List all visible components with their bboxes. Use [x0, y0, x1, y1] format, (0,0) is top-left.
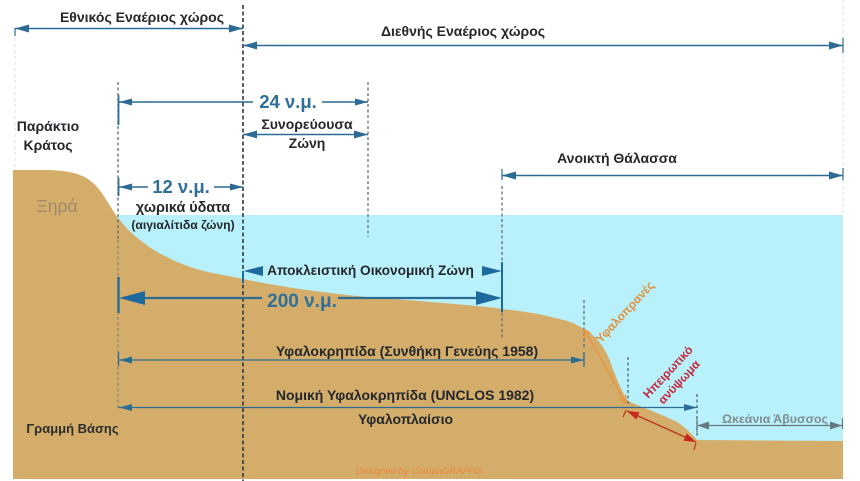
sea water — [118, 215, 843, 445]
arrow: high seas span — [502, 174, 843, 176]
continental rise arrow and label: ανύψωμα — [655, 357, 703, 407]
measure: continental shelf 1958 — [118, 343, 584, 367]
measure: legal continental shelf UNCLOS 1982: Νομική Υφαλοκρηπίδα (UNCLOS 1982) — [276, 387, 534, 403]
measure: contiguous zone: Ζώνη — [289, 135, 325, 151]
measure: 200 nautical miles: 200 ν.μ. — [267, 291, 337, 312]
continental rise arrow and label: Ηπειρωτικό — [640, 343, 696, 401]
measure: exclusive economic zone: Αποκλειστική Οικονομική Ζώνη — [267, 263, 474, 278]
measure: 24 nautical miles — [118, 91, 368, 125]
measure: 24 nautical miles: 24 ν.μ. — [259, 91, 317, 112]
measure: exclusive economic zone — [243, 262, 502, 312]
heading: international airspace: Διεθνής Εναέριος χώρος — [381, 23, 545, 39]
measure: contiguous zone: Συνορεύουσα — [261, 116, 353, 132]
label: land: Ξηρά — [36, 196, 78, 216]
heading: high seas: Ανοικτή Θάλασσα — [557, 150, 677, 166]
label: territorial waters: (αιγιαλίτιδα ζώνη) — [131, 218, 235, 232]
continental slope arrow and label — [584, 278, 657, 403]
measure: contiguous zone — [243, 116, 368, 151]
label: coastal state: Παράκτιο — [17, 118, 79, 134]
arrow: international airspace span — [243, 44, 843, 46]
land cross-section — [13, 170, 843, 479]
measure: 200 nautical miles — [118, 277, 502, 313]
label: territorial waters — [131, 200, 235, 232]
label: coastal state: Κράτος — [23, 137, 73, 153]
oceanic abyss measure — [697, 412, 842, 432]
arrow: national airspace span — [15, 28, 243, 30]
measure: 12 nautical miles: 12 ν.μ. — [152, 176, 210, 197]
oceanic abyss measure: Ωκεάνια Άβυσσος — [722, 412, 828, 426]
measure: legal continental shelf UNCLOS 1982 — [118, 387, 697, 411]
label: territorial waters: χωρικά ύδατα — [136, 200, 230, 216]
label: continental margin: Υφαλοπλαίσιο — [358, 411, 453, 427]
heading: national airspace: Εθνικός Εναέριος χώρος — [60, 9, 224, 25]
continental slope arrow and label: Υφαλοπρανές — [593, 278, 657, 346]
credit: Designed by CompuGRAPHS — [356, 466, 483, 477]
side ticks — [15, 28, 843, 180]
measure: 12 nautical miles — [118, 176, 243, 197]
continental rise arrow and label — [623, 343, 703, 450]
label: baseline: Γραμμή Βάσης — [26, 421, 119, 436]
measure: continental shelf 1958: Υφαλοκρηπίδα (Συνθήκη Γενεύης 1958) — [276, 343, 538, 359]
